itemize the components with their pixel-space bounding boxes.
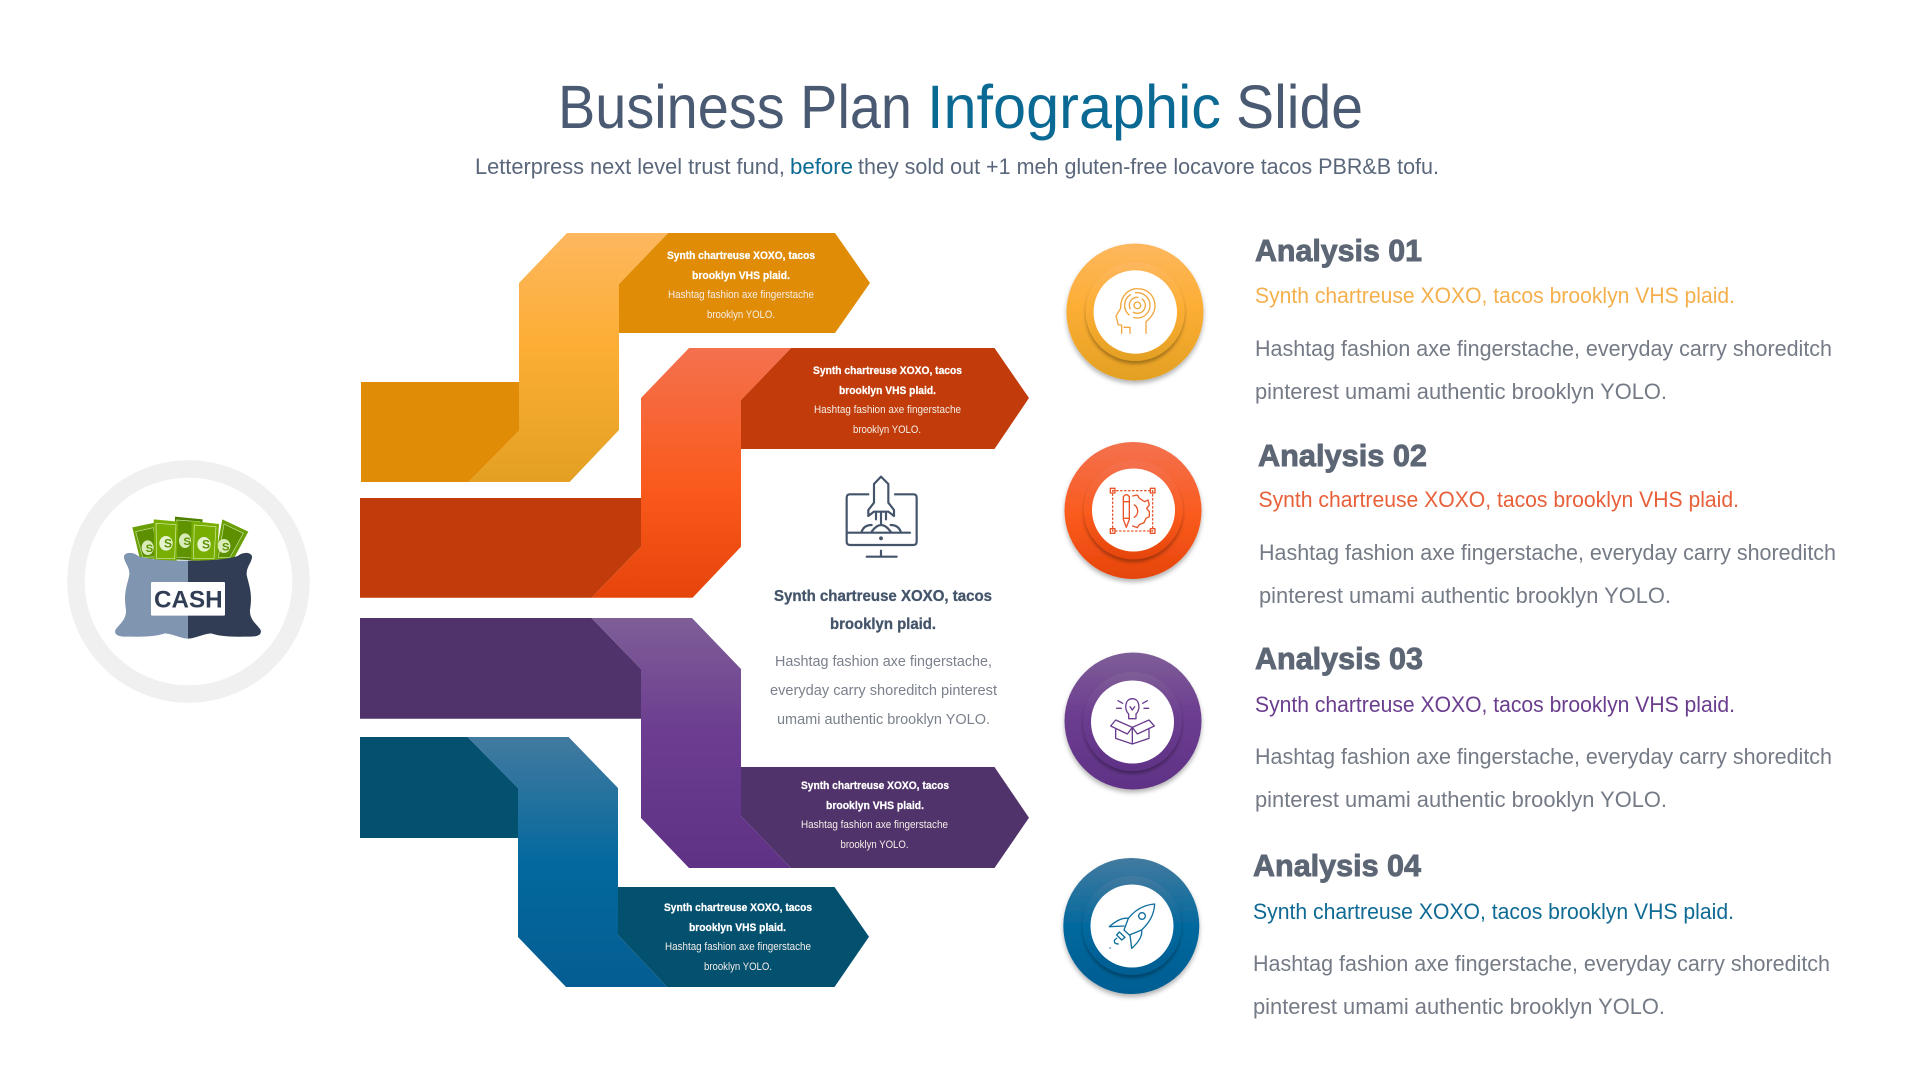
- ribbon: purple: [360, 618, 1029, 868]
- arrow text: orange: Hashtag fashion axe fingerstache: [668, 289, 814, 301]
- central text block: umami authentic brooklyn YOLO.: [777, 711, 990, 728]
- cash label: CASH: [154, 586, 223, 613]
- title: Infographic: [927, 73, 1221, 141]
- badge 4: rocket: [1063, 858, 1199, 994]
- arrow text: blue: brooklyn YOLO.: [704, 961, 772, 973]
- banknotes: S: [146, 543, 154, 555]
- ribbon: orange: [361, 233, 870, 482]
- subtitle: Letterpress next level trust fund,: [475, 154, 785, 179]
- arrow text: blue: [664, 902, 812, 973]
- arrow text: purple: brooklyn VHS plaid.: [826, 800, 924, 812]
- central text block: [770, 588, 998, 728]
- arrow text: red: Synth chartreuse XOXO, tacos: [813, 365, 962, 377]
- icon: pencil and gear: [1110, 488, 1155, 533]
- analysis 04 text: pinterest umami authentic brooklyn YOLO.: [1253, 994, 1665, 1019]
- arrow text: purple: brooklyn YOLO.: [840, 839, 908, 851]
- subtitle: before: [790, 154, 853, 179]
- banknotes: [132, 517, 248, 561]
- badge 3: idea box: [1064, 652, 1202, 790]
- analysis 04 text: Synth chartreuse XOXO, tacos brooklyn VHS plaid.: [1253, 899, 1734, 924]
- icon: rocket launching from monitor: [847, 477, 917, 557]
- badge 2: design tool: [1064, 442, 1202, 579]
- analysis 04 text: Hashtag fashion axe fingerstache, everyday carry shoreditch: [1253, 951, 1830, 976]
- title: Business Plan: [558, 73, 912, 141]
- analysis 02 text: Analysis 02: [1258, 438, 1427, 473]
- banknotes: S: [202, 538, 210, 552]
- arrow text: blue: brooklyn VHS plaid.: [689, 922, 786, 934]
- arrow text: red: [813, 365, 962, 436]
- central text block: brooklyn plaid.: [830, 616, 936, 633]
- central text block: everyday carry shoreditch pinterest: [770, 682, 998, 699]
- arrow text: blue: Hashtag fashion axe fingerstache: [665, 941, 811, 953]
- analysis 03 text: Analysis 03: [1255, 641, 1423, 676]
- icon: rocket: [1109, 904, 1155, 948]
- analysis 04 text: Analysis 04: [1253, 848, 1422, 883]
- analysis 04 text: [1253, 848, 1830, 1019]
- analysis 02 text: pinterest umami authentic brooklyn YOLO.: [1259, 583, 1671, 608]
- title: Slide: [1236, 73, 1363, 141]
- arrow text: orange: brooklyn VHS plaid.: [692, 270, 790, 282]
- arrow text: blue: Synth chartreuse XOXO, tacos: [664, 902, 812, 914]
- central text block: Hashtag fashion axe fingerstache,: [775, 653, 992, 670]
- title: [558, 73, 1363, 141]
- banknotes: S: [222, 541, 230, 553]
- icon: cash bag in ring: [76, 469, 301, 694]
- icon: light bulb in open box: [1111, 699, 1154, 744]
- analysis 01 text: Analysis 01: [1255, 233, 1422, 268]
- analysis 03 text: Hashtag fashion axe fingerstache, everyday carry shoreditch: [1255, 744, 1832, 769]
- analysis 02 text: Synth chartreuse XOXO, tacos brooklyn VHS plaid.: [1258, 487, 1739, 512]
- icon: head with maze: [1116, 289, 1155, 333]
- analysis 01 text: [1255, 233, 1832, 404]
- arrow text: purple: Hashtag fashion axe fingerstache: [801, 819, 948, 831]
- analysis 03 text: [1255, 641, 1832, 812]
- badge 1: head maze: [1066, 244, 1204, 380]
- subtitle: they sold out +1 meh gluten-free locavore tacos PBR&B tofu.: [858, 154, 1439, 179]
- analysis 03 text: pinterest umami authentic brooklyn YOLO.: [1255, 787, 1667, 812]
- arrow text: red: brooklyn YOLO.: [853, 424, 921, 436]
- analysis 03 text: Synth chartreuse XOXO, tacos brooklyn VHS plaid.: [1255, 692, 1735, 717]
- arrow text: purple: [801, 780, 949, 851]
- banknotes: S: [183, 536, 191, 548]
- analysis 01 text: pinterest umami authentic brooklyn YOLO.: [1255, 379, 1667, 404]
- ribbon: red: [360, 348, 1029, 598]
- arrow text: orange: Synth chartreuse XOXO, tacos: [667, 250, 815, 262]
- banknotes: S: [164, 537, 172, 551]
- arrow text: red: brooklyn VHS plaid.: [839, 385, 936, 397]
- arrow text: red: Hashtag fashion axe fingerstache: [814, 404, 961, 416]
- analysis 01 text: Hashtag fashion axe fingerstache, everyday carry shoreditch: [1255, 336, 1832, 361]
- subtitle: [475, 154, 1439, 179]
- analysis 01 text: Synth chartreuse XOXO, tacos brooklyn VHS plaid.: [1255, 283, 1735, 308]
- bag: [115, 553, 261, 639]
- central text block: Synth chartreuse XOXO, tacos: [774, 588, 992, 605]
- arrow text: orange: [667, 250, 815, 321]
- arrow text: purple: Synth chartreuse XOXO, tacos: [801, 780, 949, 792]
- analysis 02 text: [1258, 438, 1836, 608]
- analysis 02 text: Hashtag fashion axe fingerstache, everyday carry shoreditch: [1259, 540, 1836, 565]
- arrow text: orange: brooklyn YOLO.: [707, 309, 775, 321]
- ribbon: blue: [360, 737, 869, 987]
